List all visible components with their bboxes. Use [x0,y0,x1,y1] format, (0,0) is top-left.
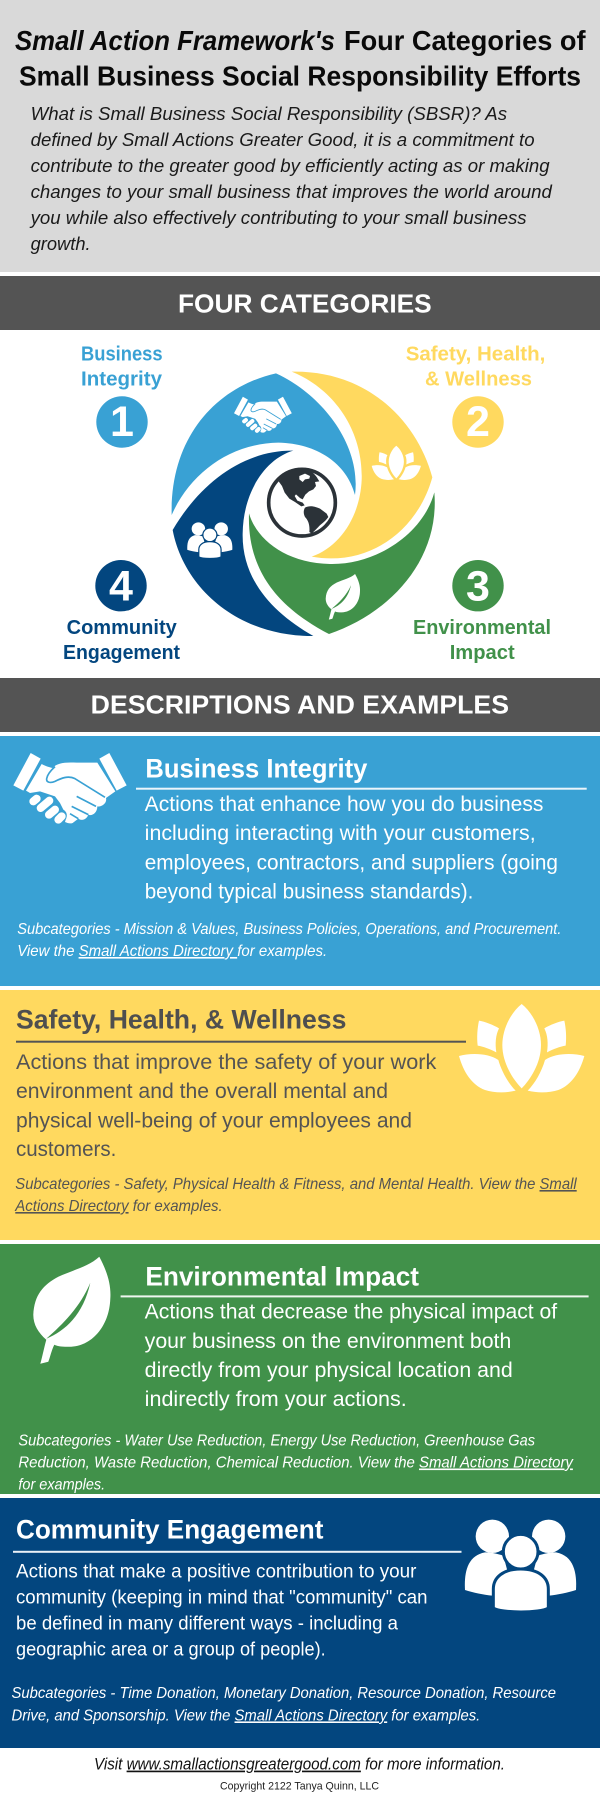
number badge 2 [452,396,504,448]
description text: Actions that decrease the physical impact of [145,1301,557,1324]
subcategories text [14,1176,577,1215]
panel: community engagement [0,1498,600,1748]
description text: be defined in many different ways - including a [16,1613,398,1635]
label: environmental impact: Impact [450,641,515,664]
heading: Environmental Impact [145,1262,419,1292]
subcategories text: Subcategories - Mission & Values, Business Policies, Operations, and Procurement. [17,921,561,938]
title [15,25,586,92]
description text: Actions that make a positive contribution to your [16,1560,417,1582]
description text: community (keeping in mind that "community" can [16,1587,428,1609]
title: Small Business Social Responsibility Efforts [19,61,581,92]
description text: Actions that improve the safety of your work [16,1051,437,1074]
intro text block: growth. [31,233,91,254]
label: business integrity: Integrity [81,368,163,391]
icon: lotus [459,1004,584,1092]
number badge 1 [96,396,148,448]
label: community engagement: Community [67,616,177,639]
subcategories text: Drive, and Sponsorship. View the Small Actions Directory for examples. [12,1707,480,1724]
description text [145,1301,557,1411]
number badge 4: 4 [109,563,133,611]
heading bar: four categories [0,276,600,330]
intro text block: changes to your small business that improves the world around [31,181,553,202]
footer: copyright: Copyright 2122 Tanya Quinn, LLC [220,1780,379,1792]
description text: directly from your physical location and [145,1359,513,1382]
panel: safety, health and wellness [0,990,600,1240]
label: community engagement: Engagement [63,641,180,664]
label: environmental impact: Environmental [413,616,551,639]
subcategories text: Actions Directory for examples. [14,1198,223,1215]
intro text block: contribute to the greater good by efficiently acting as or making [31,155,550,176]
description text: beyond typical business standards). [145,880,473,903]
label: safety, health, and wellness: Safety, Health, [406,343,545,366]
icon: leaf [33,1257,110,1364]
label: business integrity [81,343,163,391]
description text [145,793,558,903]
label: safety, health, and wellness [406,343,545,391]
description text: employees, contractors, and suppliers (going [145,851,558,874]
heading: Safety, Health, & Wellness [16,1004,346,1034]
subcategories text: Subcategories - Water Use Reduction, Energy Use Reduction, Greenhouse Gas [18,1432,535,1449]
intro text block: you while also effectively contributing to your small business [29,207,527,228]
label: community engagement [63,616,180,664]
description text [16,1560,428,1660]
swirl diagram [172,372,435,636]
icon: people small [187,522,232,558]
number badge 1: 1 [110,398,134,446]
description text: indirectly from your actions. [145,1388,407,1411]
subcategories text [12,1685,556,1724]
icon: lotus small [372,446,421,480]
number badge 4 [95,560,147,611]
header panel [0,0,600,272]
heading bar: descriptions and examples [0,678,600,732]
icon: leaf small [326,574,360,620]
description text: including interacting with your customers, [145,822,536,845]
description text [16,1051,437,1161]
intro text block: What is Small Business Social Responsibility (SBSR)? As [31,103,507,124]
icon: handshake [13,753,127,823]
heading: Community Engagement [16,1515,323,1545]
label: business integrity: Business [81,343,163,366]
number badge 2: 2 [466,398,490,446]
swirl segment: environmental impact [249,492,435,634]
intro text block: defined by Small Actions Greater Good, it is a commitment to [31,129,535,150]
heading bar: descriptions and examples: DESCRIPTIONS AND EXAMPLES [91,689,509,719]
number badge 3 [452,560,504,611]
icon: handshake small [234,397,292,433]
panel: business integrity [0,736,600,986]
heading bar: four categories: FOUR CATEGORIES [178,289,432,319]
subcategories text: for examples. [18,1476,105,1493]
description text: Actions that enhance how you do business [145,793,543,816]
heading: Business Integrity [145,754,367,784]
subcategories text [17,921,561,960]
description text: geographic area or a group of people). [16,1638,326,1660]
label: environmental impact [413,616,551,664]
icon: globe [269,469,335,536]
icon: people [465,1520,576,1612]
title: Four Categories of [344,25,586,56]
panel: environmental impact [0,1244,600,1494]
subcategories text: Subcategories - Safety, Physical Health & Fitness, and Mental Health. View the Small [15,1176,577,1193]
description text: physical well-being of your employees and [16,1109,412,1132]
description text: environment and the overall mental and [16,1080,388,1103]
title: Small Action Framework's [15,25,335,56]
subcategories text: View the Small Actions Directory for examples. [17,943,327,960]
description text: customers. [16,1138,116,1161]
swirl segment: business integrity [172,373,356,515]
subcategories text [18,1432,574,1493]
intro text block [29,103,553,254]
footer: visit link: Visit www.smallactionsgreatergood.com for more information. [94,1756,505,1774]
label: safety, health, and wellness: & Wellness [425,368,532,391]
swirl segment: community engagement [173,451,313,636]
description text: your business on the environment both [145,1330,511,1353]
number badge 3: 3 [466,563,490,611]
subcategories text: Reduction, Waste Reduction, Chemical Reduction. View the Small Actions Directory [18,1454,574,1472]
subcategories text: Subcategories - Time Donation, Monetary Donation, Resource Donation, Resource [12,1685,556,1702]
swirl segment: safety, health and wellness [292,372,432,558]
